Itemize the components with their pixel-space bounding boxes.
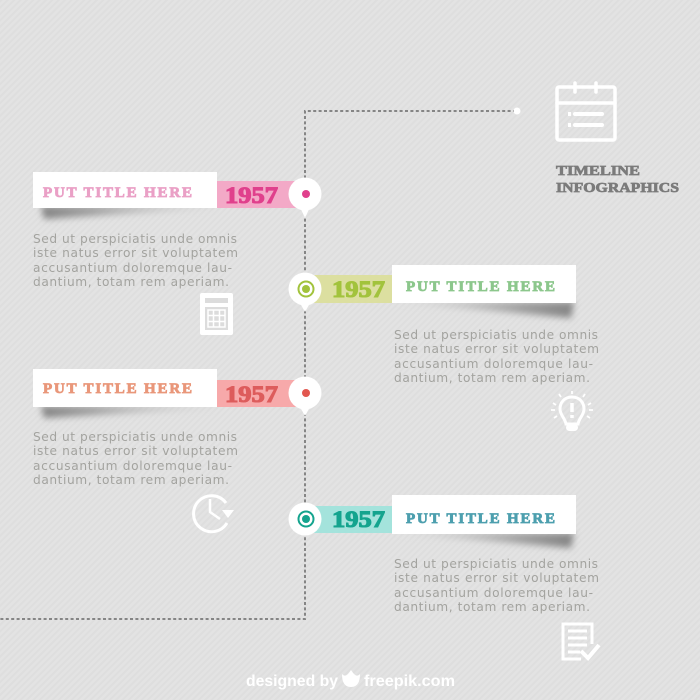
panel: coral milestone [33,369,322,532]
timeline marker [288,502,322,536]
icon: document with check [563,624,599,659]
title card [392,265,576,303]
timeline dotted connector [0,108,520,619]
card shadow [394,302,574,318]
timeline marker [288,376,322,416]
card shadow [41,406,215,418]
year: 1957 [332,507,385,532]
description: dantium, totam rem aperiam. [394,600,590,614]
card shadow [394,533,574,548]
description [33,232,238,289]
description: Sed ut perspiciatis unde omnis [394,557,598,571]
year band [310,275,392,303]
description: Sed ut perspiciatis unde omnis [394,328,598,342]
card title: PUT TITLE HERE [43,381,192,397]
footer credit [246,670,455,690]
description: dantium, totam rem aperiam. [33,473,229,487]
footer credit: freepik.com [364,673,455,690]
year band [310,506,392,533]
main heading: TIMELINE [556,164,640,179]
description: dantium, totam rem aperiam. [33,275,229,289]
footer credit: designed by [246,673,338,690]
panel: green milestone [288,265,599,431]
icon: light bulb [551,391,593,431]
icon: clock with arrow [194,496,234,532]
panel: pink milestone [33,172,322,335]
card title: PUT TITLE HERE [406,279,555,295]
card title: PUT TITLE HERE [43,185,192,201]
description: accusantium doloremque lau- [33,459,232,473]
main heading: INFOGRAPHICS [556,181,679,196]
year: 1957 [225,382,278,407]
year band [217,181,301,208]
title card [33,369,217,407]
description: accusantium doloremque lau- [394,586,593,600]
description [394,557,599,614]
year: 1957 [332,277,385,302]
description: accusantium doloremque lau- [33,261,232,275]
timeline marker [288,178,322,218]
card title: PUT TITLE HERE [406,511,555,527]
description: iste natus error sit voluptatem [33,444,238,458]
main heading [556,164,679,196]
description: iste natus error sit voluptatem [394,342,599,356]
description: iste natus error sit voluptatem [394,571,599,585]
title card [33,172,217,208]
description [394,328,599,385]
description: Sed ut perspiciatis unde omnis [33,232,237,246]
panel: teal milestone [288,495,599,659]
description: accusantium doloremque lau- [394,357,593,371]
card shadow [41,206,215,219]
year band [217,380,301,407]
description: dantium, totam rem aperiam. [394,371,590,385]
year: 1957 [225,183,278,208]
description: Sed ut perspiciatis unde omnis [33,430,237,444]
description: iste natus error sit voluptatem [33,246,238,260]
icon: calculator [200,293,233,335]
timeline marker [288,272,322,312]
title card [392,495,576,534]
header icon: calendar [557,83,615,140]
description [33,430,238,487]
